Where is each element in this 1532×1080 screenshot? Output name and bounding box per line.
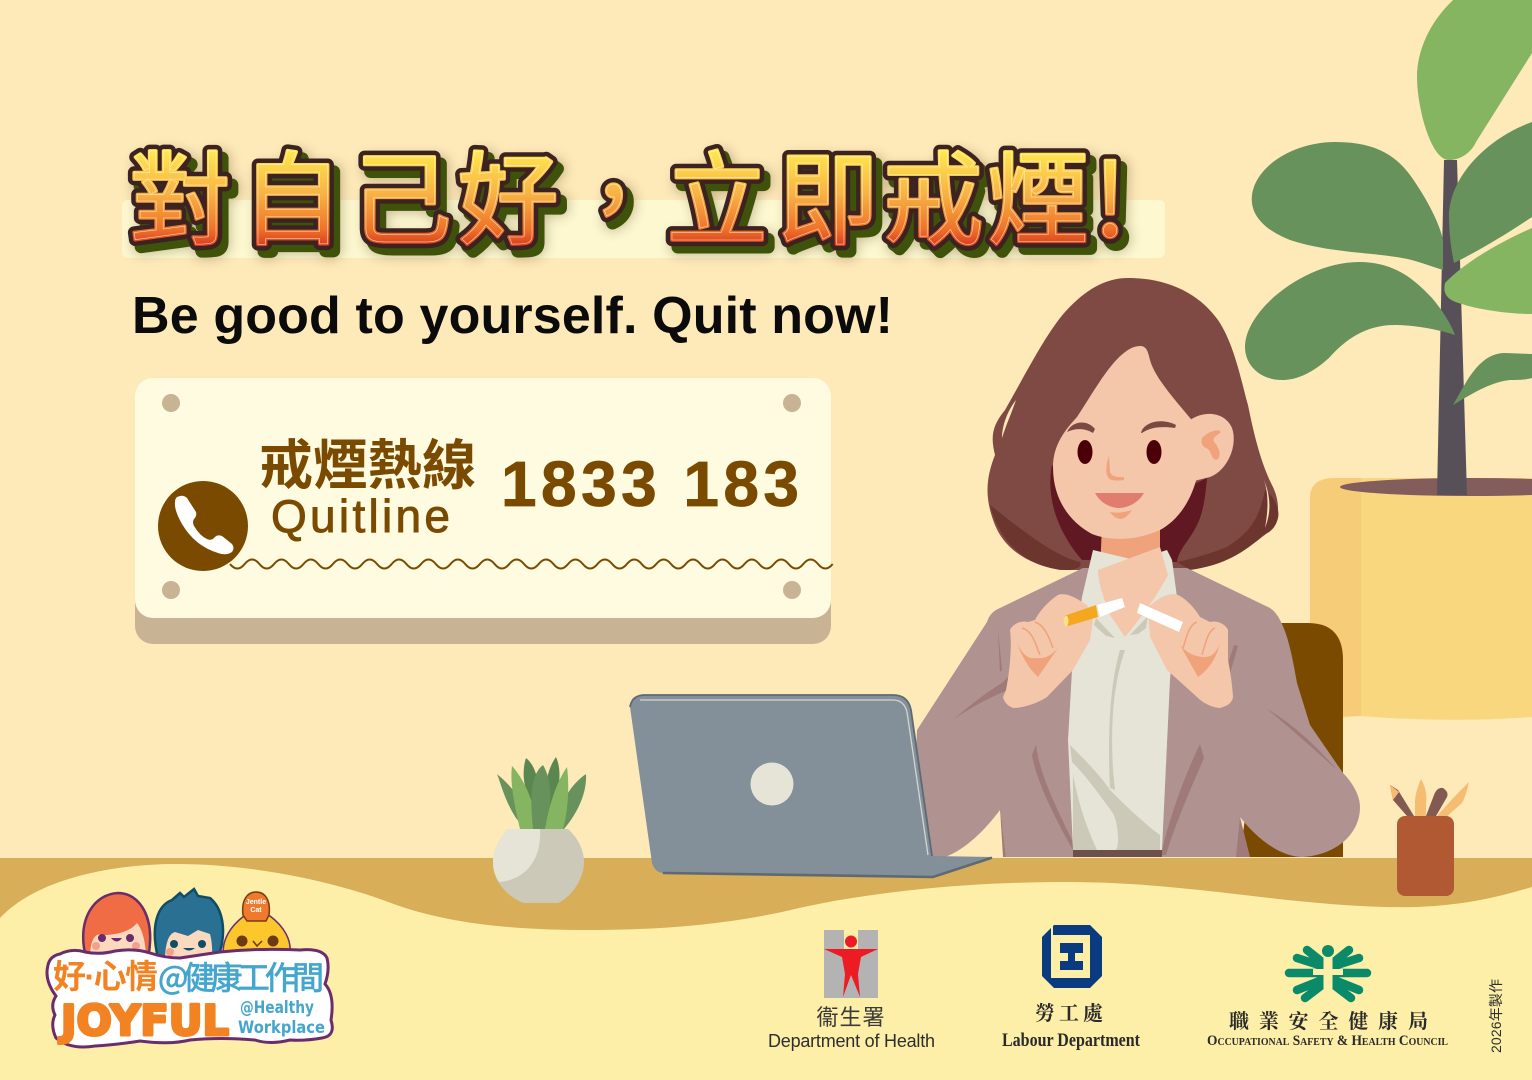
- quitline english label: Quitline: [271, 490, 450, 542]
- mascot: cat: Jentle: [246, 899, 266, 906]
- laptop logo: [750, 762, 794, 806]
- neck: [1100, 525, 1160, 572]
- LD emblem: [1042, 925, 1102, 988]
- hotline number: 1833 183: [501, 448, 799, 520]
- mascot: cat: Cat: [250, 907, 262, 914]
- laptop: [630, 695, 992, 877]
- quitline chinese label: 戒煙熱線: [259, 436, 476, 496]
- pencils: [1390, 779, 1469, 817]
- logo joyful: JOYFUL: [58, 996, 229, 1045]
- pencil cup: [1390, 779, 1469, 896]
- illustration: woman breaking a cigarette: [917, 278, 1360, 857]
- icon: phone: [158, 481, 248, 571]
- title: 對自己好,立即戒煙!: 對自己好,立即戒煙!: [135, 88, 1132, 273]
- title: 對自己好,立即戒煙!: 對自己好,立即戒煙!: [129, 81, 1126, 266]
- sign face: [135, 378, 831, 618]
- jacket: [917, 568, 1360, 857]
- plant leaves: [1245, 0, 1532, 405]
- OSHC english name: Occupational Safety & Health Council: [1207, 1033, 1448, 1049]
- panel: quitline sign: [135, 378, 833, 644]
- mascot: boy: [155, 889, 223, 962]
- OSHC chinese name: 職業安全健康局: [1229, 1010, 1428, 1033]
- OSHC emblem: [1289, 945, 1367, 1001]
- logo chinese blue text: @健康工作間: [158, 953, 324, 999]
- DH emblem: [824, 930, 878, 998]
- shirt: [1068, 547, 1177, 857]
- plant stem: [1437, 160, 1467, 495]
- DH english name: Department of Health: [768, 1031, 935, 1051]
- small desk plant: [493, 757, 586, 903]
- desk surface: [0, 858, 1532, 1080]
- cigarette: filter half: [1064, 598, 1125, 626]
- hands: [1003, 594, 1233, 708]
- logo healthy: @Healthy: [240, 998, 314, 1018]
- title: 對自己好,立即戒煙!: 對自己好,立即戒煙!: [135, 88, 1132, 273]
- title: 對自己好,立即戒煙!: 對自己好,立即戒煙!: [129, 81, 1126, 266]
- cup body: [1397, 816, 1454, 896]
- potted plant: large floor plant: [1245, 0, 1532, 720]
- succulent pot: [493, 829, 584, 903]
- title band: [122, 200, 1165, 258]
- mascot: girl: [83, 893, 150, 958]
- mascot: cat: [223, 892, 290, 958]
- logo plate: [47, 949, 332, 1047]
- sign base: [135, 390, 831, 644]
- phone cord: [230, 560, 833, 568]
- plant pot: [1310, 478, 1532, 720]
- hair: [988, 278, 1278, 570]
- logo: Labour Department: [1002, 925, 1141, 1051]
- cream wave foreground: [0, 864, 1532, 1080]
- chair: [1240, 623, 1343, 857]
- succulent leaves: [497, 757, 586, 829]
- logo workplace: Workplace: [238, 1018, 325, 1038]
- subtitle: Be good to yourself. Quit now!: [132, 287, 893, 345]
- logo: Joyful @ Healthy Workplace: [47, 889, 332, 1047]
- DH chinese name: 衞生署: [816, 1000, 886, 1032]
- logo: Department of Health: [768, 930, 935, 1051]
- LD english name: Labour Department: [1002, 1031, 1141, 1051]
- production year note: 2026年製作: [1488, 979, 1504, 1053]
- title: 對自己好,立即戒煙!: 對自己好,立即戒煙!: [129, 81, 1126, 266]
- LD chinese name: 勞工處: [1035, 1002, 1107, 1025]
- logo: Occupational Safety & Health Council: [1207, 945, 1448, 1049]
- cigarette: broken half: [1137, 603, 1183, 632]
- face: [1053, 346, 1234, 539]
- sign screws: [162, 394, 801, 599]
- logo chinese orange text: 好·心情: [53, 958, 158, 995]
